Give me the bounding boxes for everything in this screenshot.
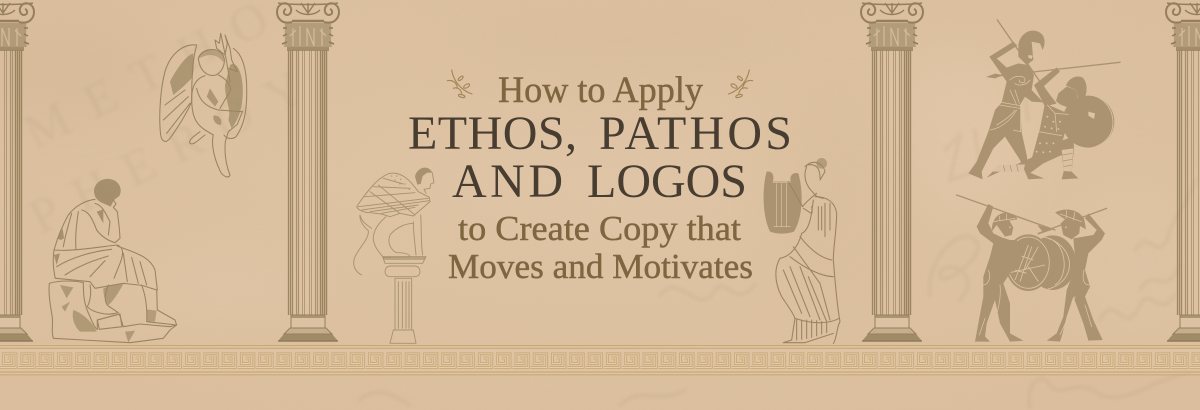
icon: right laurel sprig bbox=[728, 70, 753, 98]
subheading: to Create Copy that: to Create Copy that bbox=[458, 209, 741, 248]
heading: Ethos, Pathos: ETHOS, bbox=[408, 107, 577, 160]
icon: duelling warriors, upper vase figures bbox=[968, 20, 1120, 179]
icon: clashing hoplites, lower vase figures bbox=[957, 195, 1107, 342]
icon: sphinx on ionic pedestal bbox=[354, 168, 434, 275]
icon: round shields bbox=[1005, 234, 1076, 291]
greek key border bbox=[0, 344, 1200, 375]
icon: sphinx pedestal bbox=[383, 257, 426, 343]
column: far right bbox=[1166, 3, 1200, 341]
heading: Ethos, Pathos: PATHOS bbox=[599, 107, 792, 160]
icon: left laurel sprig bbox=[447, 70, 472, 98]
column: left centre bbox=[277, 3, 339, 341]
heading: Ethos, Pathos bbox=[408, 107, 792, 160]
column: far left bbox=[0, 3, 34, 341]
background: parchment: PHEROY bbox=[20, 50, 330, 245]
icon: seated philosopher statue bbox=[49, 179, 177, 343]
icon: shield bbox=[1062, 96, 1114, 148]
icon: winged cupid with laurel bbox=[160, 33, 247, 177]
heading: and Logos: AND bbox=[452, 155, 563, 208]
heading: and Logos: LOGOS bbox=[587, 155, 747, 208]
column: right centre bbox=[861, 3, 923, 341]
subheading: Moves and Motivates: Moves and Motivates bbox=[448, 247, 753, 286]
heading: How to Apply: How to Apply bbox=[498, 70, 703, 111]
title block bbox=[408, 70, 792, 286]
icon: woman playing lyre bbox=[764, 158, 840, 343]
heading: and Logos bbox=[452, 155, 747, 208]
